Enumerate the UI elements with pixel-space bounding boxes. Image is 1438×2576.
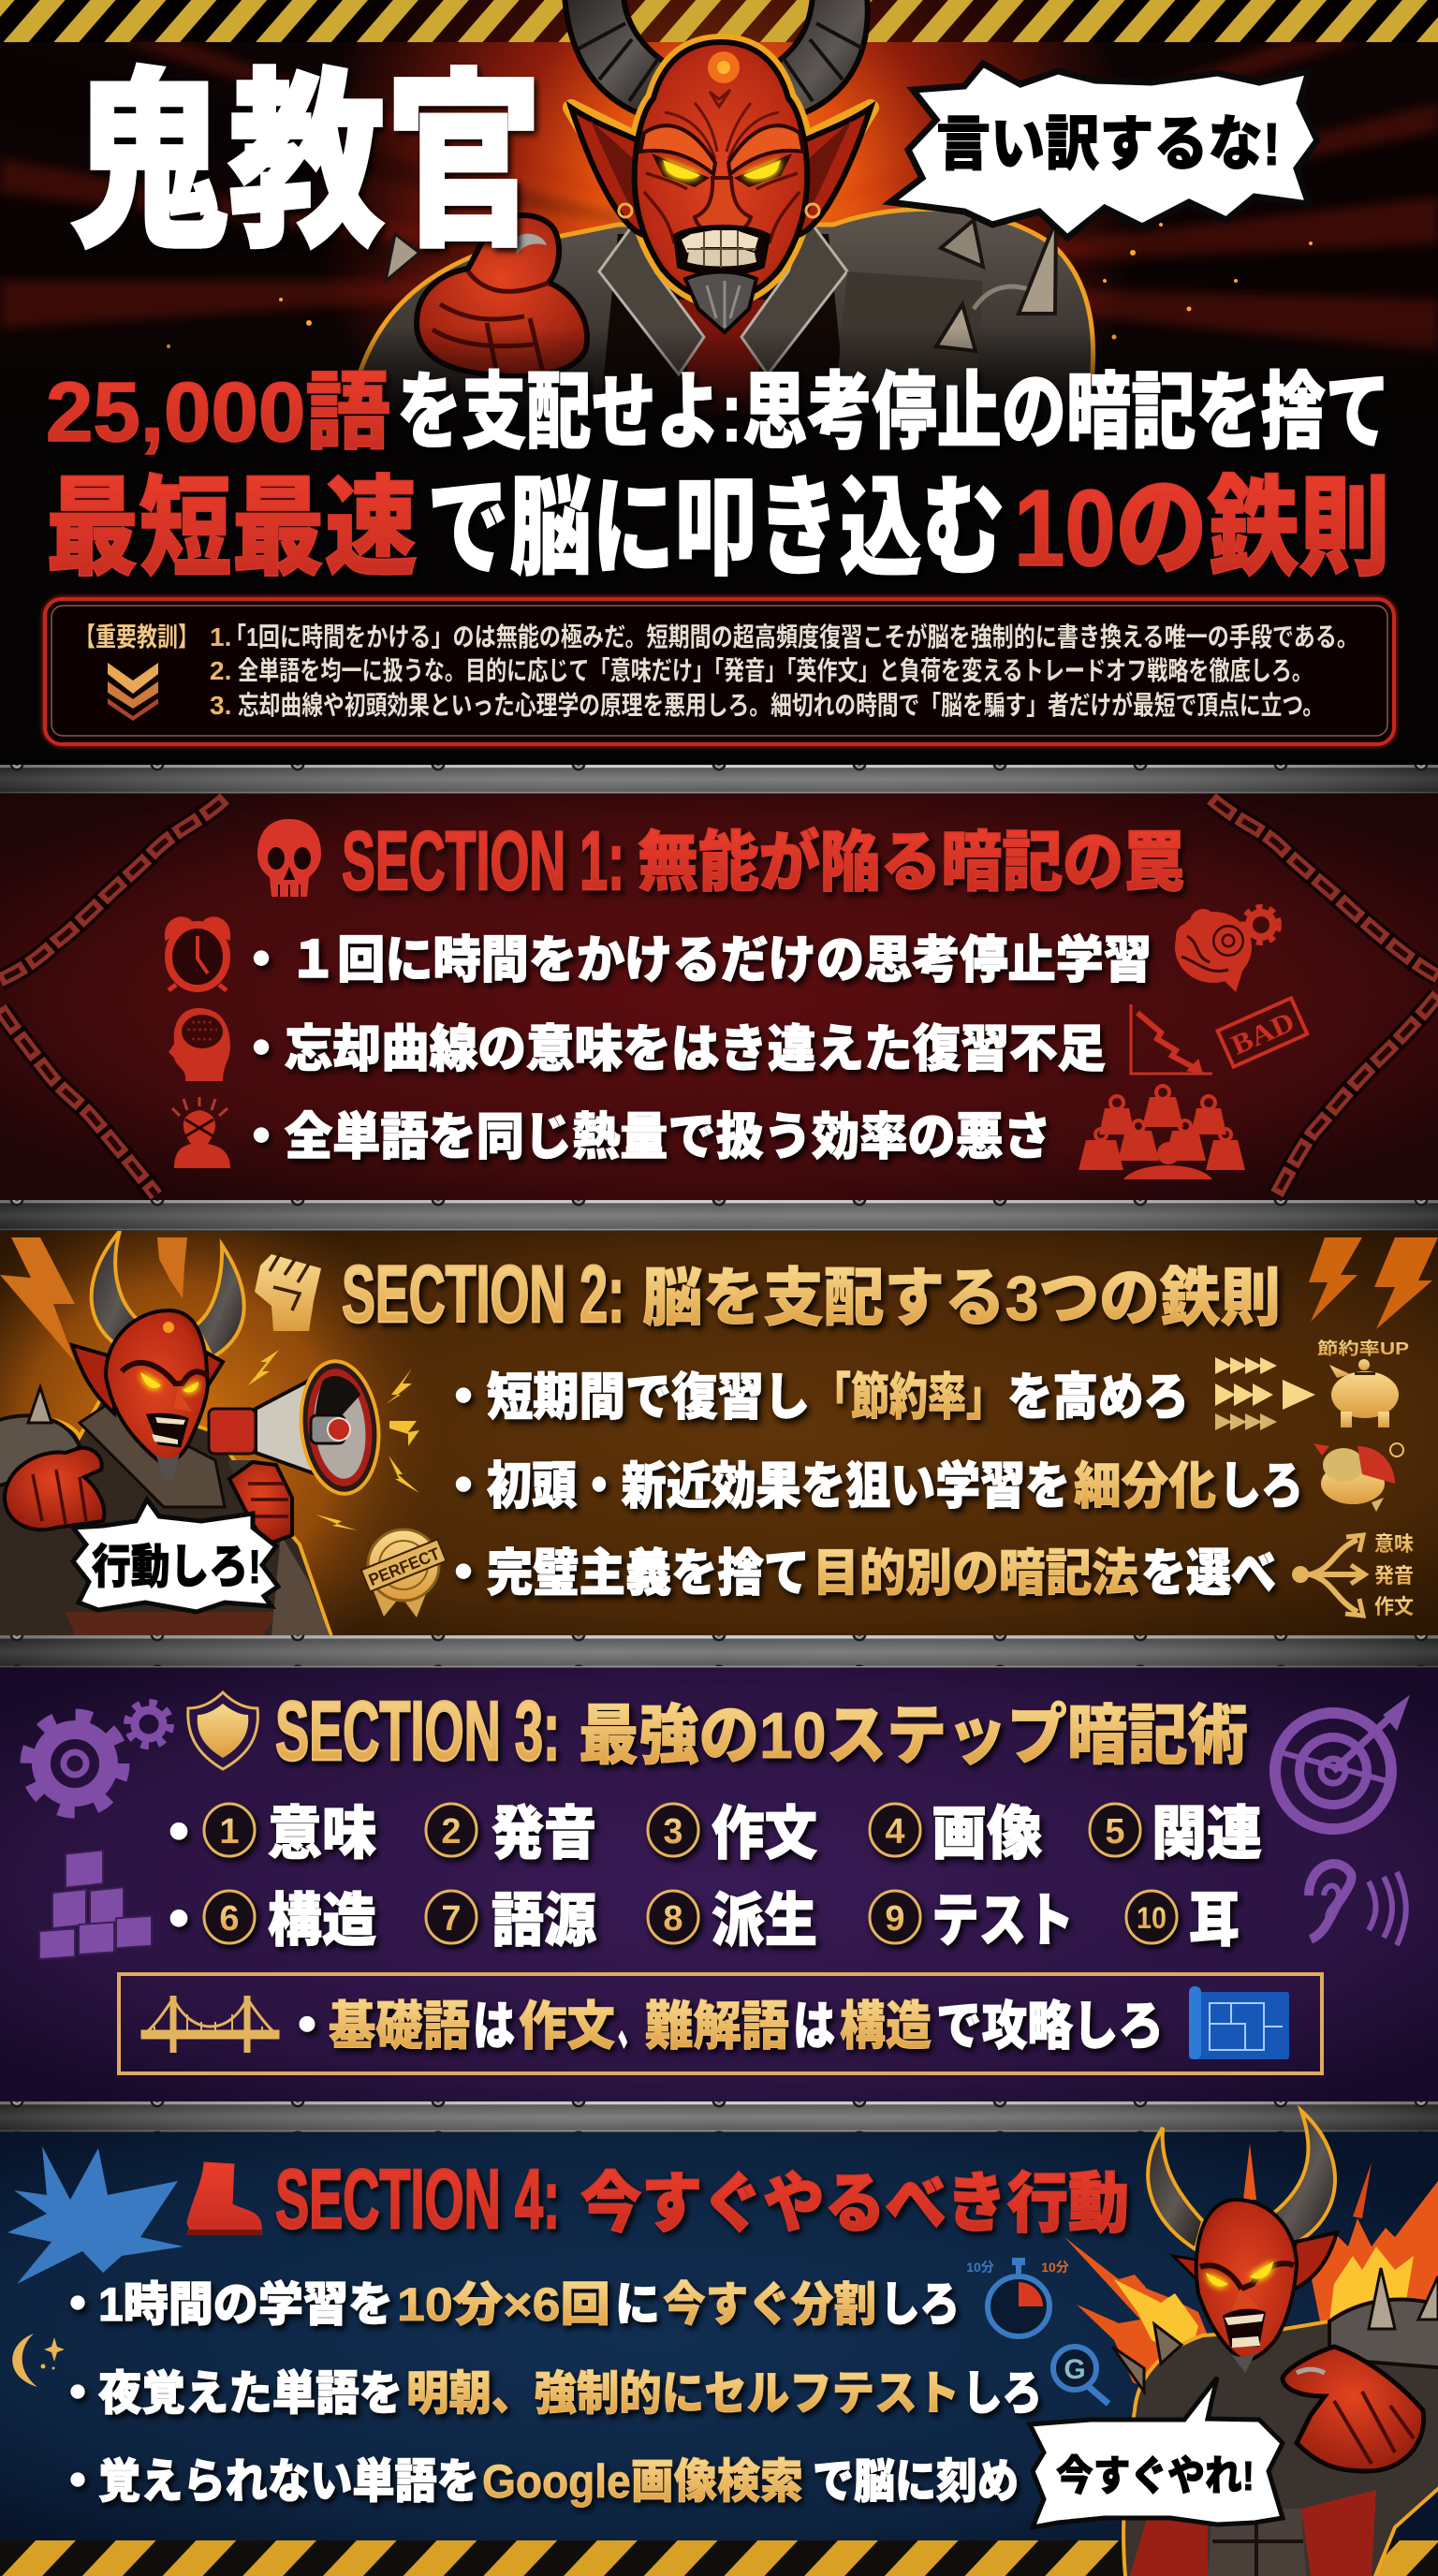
headline line 1: 25,000語 <box>46 366 390 460</box>
icon: arrows <box>1215 1357 1315 1430</box>
hazard stripe top <box>0 0 1438 42</box>
head <box>1196 2200 1297 2360</box>
callout text: 基礎語 <box>329 1997 470 2056</box>
metal divider 3 <box>0 1635 1438 1668</box>
bullet 3: 全単語を同じ熱量で扱う効率の悪さ <box>285 1109 1051 1165</box>
bullet 1: 今すぐ分割 <box>663 2278 876 2331</box>
row 2: steps 6-10: テスト <box>932 1889 1074 1954</box>
callout text: 、 <box>618 1997 642 2056</box>
callout text <box>281 1997 1164 2056</box>
bullet 1 <box>438 1369 1189 1426</box>
row 2: steps 6-10: 10 <box>1137 1901 1167 1935</box>
bullet 2: 細分化 <box>1074 1458 1216 1515</box>
icon: stressed head <box>172 1097 230 1168</box>
bullet 1: に <box>615 2278 660 2331</box>
body <box>0 1395 335 1647</box>
icon: blue burst <box>7 2146 183 2284</box>
icon: falling graph <box>1131 1004 1212 1074</box>
icon: shield <box>188 1692 257 1769</box>
bullet 3: 目的別の暗記法 <box>813 1545 1138 1602</box>
heading: section 4: SECTION 4: <box>275 2153 560 2247</box>
bullet 2: 明朝、強制的にセルフテスト <box>406 2367 960 2420</box>
bullet 1: 1時間の学習を <box>98 2278 393 2331</box>
megaphone <box>209 1357 385 1498</box>
pointing fist <box>1283 2347 1424 2471</box>
metal divider 2 <box>0 1200 1438 1231</box>
callout box <box>119 1974 1322 2073</box>
bullet 1: 「節約率」 <box>813 1369 1005 1426</box>
label: 重要教訓: 【重要教訓】 <box>75 622 198 651</box>
lesson 2: 2. <box>210 656 231 685</box>
row 1: steps 1-5: ・ <box>150 1802 208 1866</box>
labels: purposes: 発音 <box>1374 1564 1414 1588</box>
icon: perfect badge <box>361 1530 447 1617</box>
bullet 2: ・ <box>236 1021 286 1077</box>
small sparks around megaphone <box>248 1350 419 1530</box>
row 2: steps 6-10: 語源 <box>492 1889 596 1954</box>
devil: main instructor <box>348 0 1093 421</box>
icon: branching arrows <box>1295 1535 1365 1616</box>
icon: magnifier: G <box>1064 2354 1086 2385</box>
pointing fist <box>5 1448 104 1530</box>
row 2: steps 6-10: 9 <box>885 1899 905 1939</box>
bullet 3 <box>54 2455 1019 2508</box>
bullet 3: Google画像検索 <box>482 2455 803 2508</box>
icon: skull <box>257 819 321 897</box>
row 1: steps 1-5: 4 <box>885 1812 905 1852</box>
panel: header <box>0 0 1438 760</box>
bullet 1: １回に時間をかけるだけの思考停止学習 <box>289 932 1152 988</box>
labels: purposes <box>1374 1532 1414 1618</box>
panel: section 4 <box>0 2111 1438 2576</box>
icon: boot <box>187 2162 261 2235</box>
heading: section 3: SECTION 3: <box>275 1685 560 1778</box>
heading: section 3: 最強の10ステップ暗記術 <box>579 1699 1248 1772</box>
icon: blueprint <box>1189 1986 1289 2059</box>
head <box>106 1310 208 1462</box>
bullet 2: 夜覚えた単語を <box>98 2367 403 2420</box>
bullet 2: ・ <box>438 1458 489 1515</box>
row 1: steps 1-5: 5 <box>1105 1812 1125 1852</box>
metal divider 1 <box>0 765 1438 794</box>
bullet 3: ・ <box>236 1109 286 1165</box>
icon: ear with sound <box>1309 1864 1406 1945</box>
icon: BAD stamp <box>1218 998 1307 1067</box>
bullet 1: ・ <box>438 1369 489 1426</box>
headline line 2 <box>46 467 1390 589</box>
callout text: ・ <box>281 1997 333 2056</box>
bullet 1: を高めろ <box>1007 1369 1189 1426</box>
speech bubble: 言い訳するな!: 言い訳するな! <box>936 110 1281 178</box>
lesson 3: 3. <box>210 691 231 720</box>
speech bubble: 今すぐやれ!: 今すぐやれ! <box>1056 2453 1255 2499</box>
bullet 3: で脳に刻め <box>813 2455 1019 2508</box>
icon: stopwatch <box>966 2258 1069 2336</box>
speech bubble: 行動しろ!: 行動しろ! <box>92 1541 261 1593</box>
bullet 3: ・ <box>438 1545 489 1602</box>
labels: purposes: 作文 <box>1374 1595 1414 1618</box>
bullet 2: ・ <box>54 2367 101 2420</box>
bullet 3: 完璧主義を捨て <box>487 1545 810 1602</box>
bullet 2: しろ <box>1219 1458 1303 1515</box>
lightning right <box>1309 1237 1438 1329</box>
bullet 2: しろ <box>962 2367 1042 2420</box>
panel: section 2 <box>0 1231 1438 1647</box>
row 2: steps 6-10: 耳 <box>1189 1889 1240 1954</box>
heading: section 1: 無能が陥る暗記の罠 <box>638 826 1184 899</box>
bullet 1: 短期間で復習し <box>487 1369 810 1426</box>
heading: section 2: 脳を支配する3つの鉄則 <box>642 1263 1281 1334</box>
row 1: steps 1-5: 画像 <box>932 1802 1042 1866</box>
headline line 2: で脳に叩き込む <box>427 467 1005 589</box>
bullet 1: 10分×6回 <box>397 2278 610 2331</box>
icon: alarm clock <box>167 918 228 990</box>
body <box>1123 2300 1438 2576</box>
label: 節約率UP: 節約率UP <box>1317 1339 1409 1358</box>
callout text: は <box>473 1997 515 2056</box>
icon: bridge <box>142 1996 278 2053</box>
bullet 1 <box>54 2278 960 2331</box>
row 1: steps 1-5: 作文 <box>712 1802 817 1866</box>
header glow background <box>0 0 1438 440</box>
panel: section 1 <box>0 794 1438 1201</box>
row 1: steps 1-5: 1 <box>219 1812 240 1852</box>
row 2: steps 6-10: ・ <box>150 1889 208 1954</box>
row 1: steps 1-5 <box>150 1802 1262 1866</box>
row 2: steps 6-10 <box>150 1889 1240 1954</box>
row 2: steps 6-10: 6 <box>219 1899 240 1939</box>
row 1: steps 1-5: 3 <box>663 1812 683 1852</box>
heading: section 1: SECTION 1: <box>342 813 624 907</box>
row 2: steps 6-10: 構造 <box>268 1889 376 1954</box>
icon: moon and stars <box>12 2334 65 2387</box>
panel: key lessons <box>45 599 1394 744</box>
panel: section 3 <box>0 1668 1438 2102</box>
heading: section 3 <box>275 1685 1248 1778</box>
bullet 2 <box>54 2367 1042 2420</box>
icon: stopwatch: 10分 <box>966 2260 994 2275</box>
icon: fist <box>255 1252 321 1331</box>
row 1: steps 1-5: 2 <box>441 1812 462 1852</box>
lightning left <box>0 1237 187 1362</box>
row 1: steps 1-5: 発音 <box>492 1802 596 1866</box>
icon: stopwatch: 10分 <box>1041 2260 1069 2275</box>
row 1: steps 1-5: 関連 <box>1152 1802 1262 1866</box>
icon: segmented brain <box>1313 1443 1403 1512</box>
icon: chevrons <box>108 663 158 721</box>
title: 鬼教官 <box>70 56 543 271</box>
heading: section 4: 今すぐやるべき行動 <box>580 2167 1129 2240</box>
icon: piggy bank <box>1329 1359 1399 1427</box>
labels: purposes: 意味 <box>1374 1532 1414 1556</box>
icon: pile of weights <box>1078 1086 1245 1179</box>
heading: section 2: SECTION 2: <box>342 1250 624 1339</box>
sparks <box>167 223 1313 348</box>
header rays <box>0 39 1438 351</box>
icon: BAD stamp: BAD <box>1226 1006 1299 1061</box>
bullet 1: ・ <box>236 932 286 988</box>
callout text: 作文 <box>519 1997 615 2056</box>
explosion behind devil <box>1064 2144 1438 2396</box>
row 1: steps 1-5: 意味 <box>268 1802 376 1866</box>
speech bubble: 今すぐやれ! <box>1030 2378 1283 2527</box>
megaphone hand <box>229 1462 292 1544</box>
icon: brain with gears <box>1175 907 1279 992</box>
ears <box>72 1345 114 1413</box>
devil with megaphone <box>0 1231 385 1647</box>
fade to black <box>0 328 1438 421</box>
row 2: steps 6-10: 派生 <box>712 1889 817 1954</box>
speech bubble: 行動しろ! <box>73 1500 278 1612</box>
callout text: 構造 <box>840 1997 932 2056</box>
row 2: steps 6-10: 8 <box>663 1899 683 1939</box>
bullet 3: 覚えられない単語を <box>98 2455 479 2508</box>
speech bubble: 言い訳するな! <box>890 64 1317 238</box>
icon: gears <box>28 1704 169 1810</box>
heading: section 2 <box>342 1250 1281 1339</box>
hazard stripe bottom <box>0 2540 1438 2576</box>
bullet 2: 初頭・新近効果を狙い学習を <box>487 1458 1070 1515</box>
heading: section 4 <box>275 2153 1129 2247</box>
bullet 3: ・ <box>54 2455 101 2508</box>
lesson 1: 1. <box>210 622 231 651</box>
orange glow behind devil <box>0 1231 449 1636</box>
row 2: steps 6-10: 7 <box>441 1899 462 1939</box>
icon: head with brain <box>169 1008 230 1081</box>
bullet 3: を選べ <box>1141 1545 1276 1602</box>
icon: target with arrow <box>1273 1696 1409 1835</box>
bullet 3 <box>438 1545 1276 1602</box>
bullet 1: ・ <box>54 2278 101 2331</box>
horns <box>1148 2128 1203 2249</box>
icon: magnifier <box>1053 2347 1108 2404</box>
heading: section 1 <box>342 813 1184 907</box>
devil pointing hand <box>417 215 587 376</box>
bullet 2: 忘却曲線の意味をはき違えた復習不足 <box>285 1021 1106 1077</box>
metal divider 4 <box>0 2101 1438 2132</box>
devil: pointing <box>1112 2111 1438 2576</box>
bullet 1: しろ <box>880 2278 960 2331</box>
chains <box>0 798 1438 1195</box>
icon: boxes <box>39 1850 152 1959</box>
icon: perfect badge: PERFECT <box>366 1544 443 1589</box>
callout text: で攻略しろ <box>936 1997 1164 2056</box>
horns <box>92 1231 147 1350</box>
horn tips over divider 4 <box>1155 2104 1325 2136</box>
ears <box>1284 2232 1337 2293</box>
callout text: 難解語 <box>645 1997 789 2056</box>
headline line 2: 最短最速 <box>46 467 418 589</box>
callout text: は <box>793 1997 835 2056</box>
